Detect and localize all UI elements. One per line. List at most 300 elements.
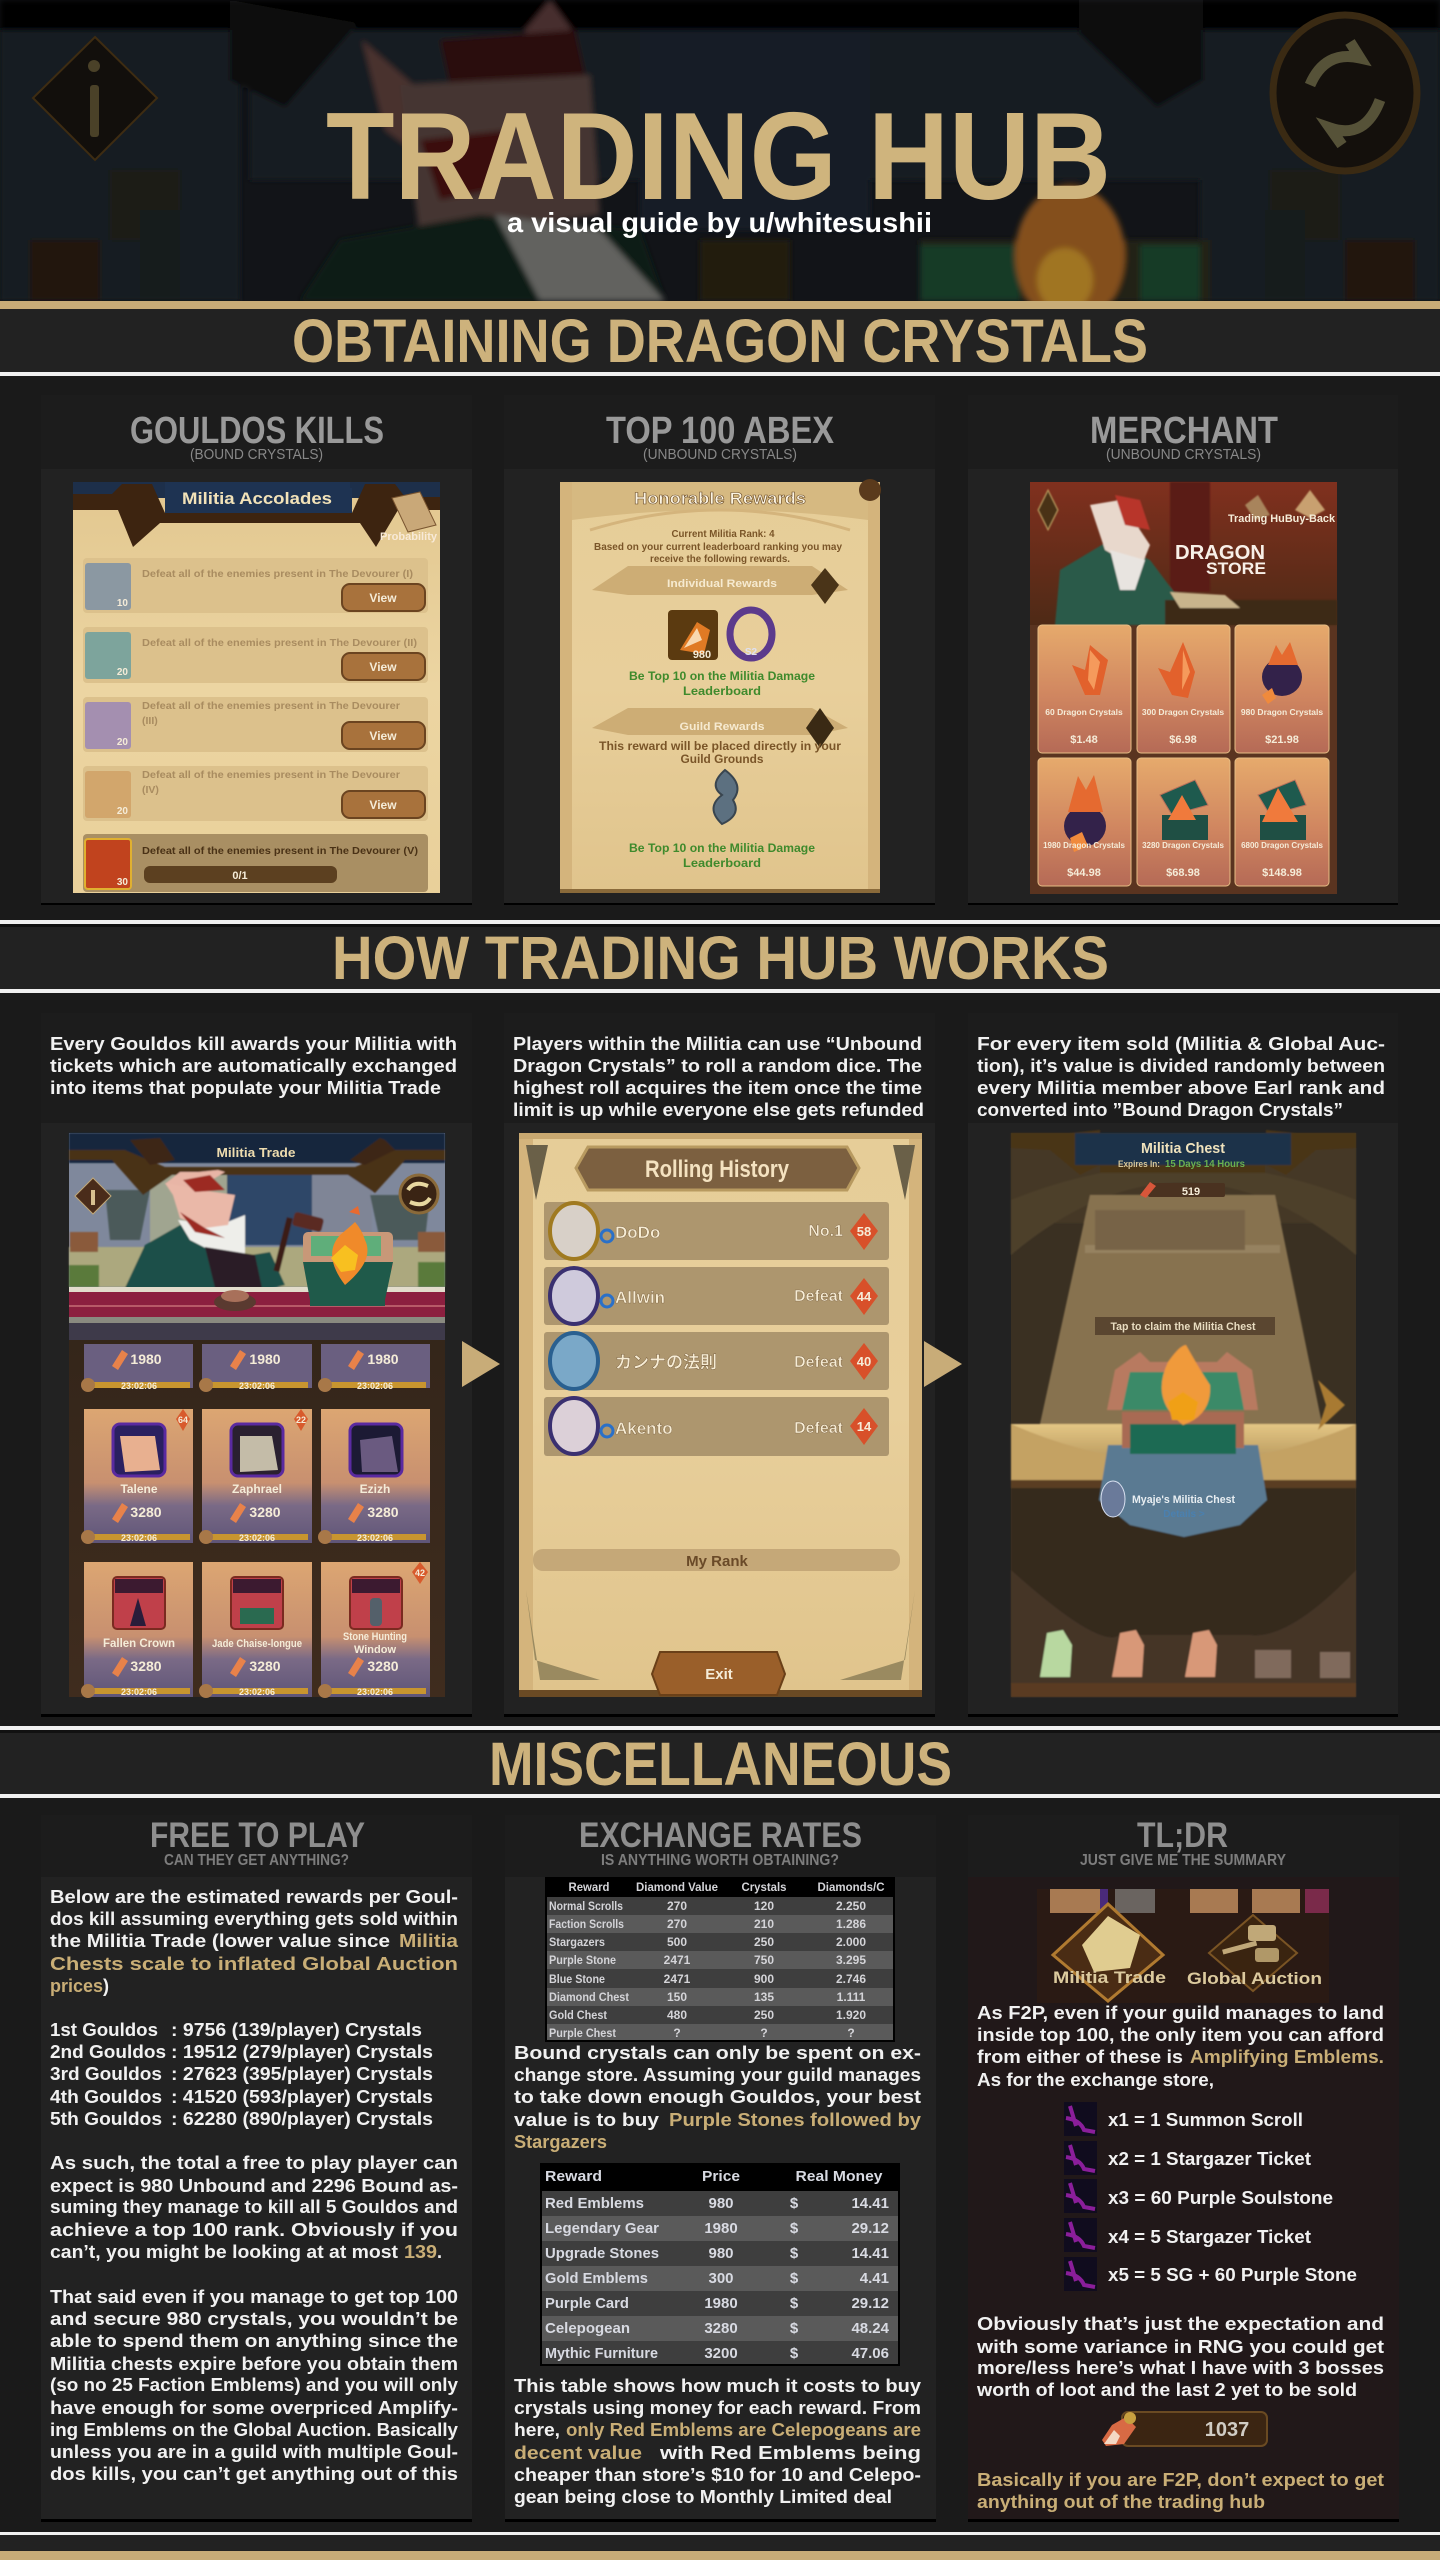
paragraph: estimated rewards: ): [103, 1976, 109, 1996]
panel: militia trade step: [41, 1013, 472, 1717]
screenshot: militia accolades: (IV): [142, 784, 159, 796]
prices and timers: 3280: [367, 1504, 399, 1520]
screenshot: dragon store: 980 Dragon Crystals: [1241, 707, 1323, 717]
screenshot: militia accolades: Defeat all of the enemies present in The Devourer (I): [142, 568, 413, 580]
table: diamond value per crystal: 2.000: [836, 1935, 866, 1949]
screenshot: dragon store: $148.98: [1262, 867, 1302, 879]
paragraph: total expectation: achieve a top 100 rank. Obviously if you: [50, 2220, 458, 2240]
panel: gouldos kills: GOULDOS KILLS: [130, 410, 384, 452]
prices and timers: 23:02:06: [357, 1381, 393, 1391]
panel: free to play: CAN THEY GET ANYTHING?: [164, 1852, 349, 1869]
table: diamond value per crystal: 150: [667, 1990, 687, 2004]
table: real money cost: Celepogean: [545, 2320, 630, 2337]
table: real money cost: 1980: [704, 2295, 738, 2312]
section band: obtaining dragon crystals: OBTAINING DRAGON CRYSTALS: [292, 307, 1148, 375]
table: diamond value per crystal: Stargazers: [549, 1935, 605, 1949]
table: diamond value per crystal: 480: [667, 2008, 687, 2022]
table: real money cost: $: [790, 2295, 799, 2312]
table: real money cost: $: [790, 2320, 799, 2337]
list: crystals per gouldos: 5th Gouldos: [50, 2109, 162, 2129]
paragraph: rng variance: worth of loot and the last 2 yet to be sold: [976, 2380, 1357, 2400]
screenshot: rolling history: 40: [857, 1354, 871, 1369]
list: amplifying emblem rewards: x3 = 60 Purple Soulstone: [1108, 2188, 1333, 2208]
table: diamond value per crystal: Faction Scrolls: [549, 1917, 624, 1931]
prices and timers: 1980: [130, 1351, 162, 1367]
prices and timers: 23:02:06: [239, 1533, 275, 1543]
table: real money cost: Legendary Gear: [545, 2220, 659, 2237]
paragraph: f2p options: inside top 100, the only item you can afford: [977, 2025, 1384, 2045]
paragraph: table explanation: crystals using money for each reward. From: [514, 2398, 921, 2418]
screenshot: militia accolades: Militia Accolades: [182, 489, 332, 508]
list: crystals per gouldos: : 41520 (593/player) Crystals: [171, 2087, 433, 2107]
step 2 text: highest roll acquires the item once the time: [513, 1078, 922, 1098]
screenshot: militia accolades: 30: [117, 877, 128, 888]
step 2 text: [513, 1034, 924, 1120]
paragraph: estimated rewards: Below are the estimated rewards per Goul-: [50, 1887, 458, 1907]
paragraph: f2p options: As for the exchange store,: [977, 2070, 1214, 2090]
screenshot: militia chest: 519: [1182, 1186, 1200, 1198]
screenshot: honorable rewards: Current Militia Rank: 4: [672, 529, 775, 540]
screenshot: dragon store: $1.48: [1070, 734, 1098, 746]
table: diamond value per crystal: 750: [754, 1953, 774, 1967]
table: diamond value per crystal: 2471: [664, 1953, 691, 1967]
title: TRADING HUB: [326, 88, 1111, 226]
section band: how trading hub works: HOW TRADING HUB WORKS: [332, 924, 1109, 992]
panel: merchant: MERCHANT: [1090, 410, 1278, 452]
table: real money cost: 47.06: [851, 2345, 889, 2362]
panel: merchant: [968, 395, 1398, 905]
screenshot: militia accolades: View: [369, 660, 397, 674]
paragraph: rng variance: [976, 2314, 1384, 2400]
screenshot: rolling history: 44: [857, 1289, 872, 1304]
table: diamond value per crystal: ?: [847, 2026, 855, 2040]
table: diamond value per crystal: Crystals: [742, 1880, 787, 1894]
conclusion: Basically if you are F2P, don’t expect to get: [977, 2470, 1384, 2490]
table: diamond value per crystal: 2.250: [836, 1899, 866, 1913]
paragraph: total expectation: suming they manage to kill all 5 Gouldos and: [50, 2197, 458, 2217]
screenshot: honorable rewards: Be Top 10 on the Militia Damage: [629, 843, 815, 855]
paragraph: conclusion: ing Emblems on the Global Auction. Basically: [50, 2420, 458, 2440]
item cards row 3: Stone Hunting: [343, 1631, 407, 1643]
screenshot: honorable rewards: Leaderboard: [683, 858, 761, 870]
list: crystals per gouldos: 3rd Gouldos: [50, 2064, 162, 2084]
table: real money cost: Price: [702, 2168, 740, 2185]
paragraph: rng variance: with some variance in RNG you could get: [976, 2337, 1384, 2357]
table: diamond value per crystal: 2.746: [836, 1972, 866, 1986]
subtitle: a visual guide by u/whitesushii: [507, 207, 932, 238]
screenshot: rolling history: DoDo: [615, 1223, 660, 1242]
screenshot: dragon store: $44.98: [1067, 867, 1101, 879]
item cards row 3: 42: [415, 1568, 425, 1578]
item cards row 2: [84, 1409, 430, 1543]
paragraph: bound crystals: Bound crystals can only be spent on ex-: [514, 2043, 921, 2063]
screenshot: dragon store: STORE: [1206, 559, 1266, 578]
panel: top 100 abex: TOP 100 ABEX: [606, 410, 835, 452]
icon: bound crystal counter: [1102, 2412, 1267, 2446]
table: diamond value per crystal: 3.295: [836, 1953, 866, 1967]
screenshot: militia trade: [69, 1133, 445, 1698]
screenshot: militia accolades: [73, 482, 440, 893]
table: diamond value per crystal: ?: [673, 2026, 681, 2040]
screenshot: honorable rewards: Be Top 10 on the Militia Damage: [629, 671, 815, 683]
screenshot: rolling history: 14: [857, 1419, 872, 1434]
screenshot: rolling history: No.1: [808, 1223, 843, 1240]
screenshot: dragon store: 60 Dragon Crystals: [1045, 707, 1123, 717]
paragraph: f2p options: Amplifying Emblems.: [1190, 2047, 1384, 2067]
table: diamond value per crystal: 1.286: [836, 1917, 866, 1931]
paragraph: estimated rewards: Chests scale to inflated Global Auction: [50, 1954, 458, 1974]
screenshot: militia accolades: 20: [117, 737, 128, 748]
step 3 text: tion), it’s value is divided randomly between: [977, 1056, 1385, 1076]
screenshot: rolling history: Rolling History: [645, 1156, 790, 1183]
screenshot: militia accolades: Defeat all of the enemies present in The Devourer (V): [142, 845, 418, 857]
table: diamond value per crystal: 270: [667, 1917, 687, 1931]
item cards row 3: Jade Chaise-longue: [212, 1638, 302, 1650]
screenshot: dragon store: [1030, 482, 1337, 894]
list: crystals per gouldos: [50, 2020, 433, 2129]
table: real money cost: 980: [708, 2245, 734, 2262]
screenshot: honorable rewards: Honorable Rewards: [634, 489, 806, 508]
step 1 text: into items that populate your Militia Trade: [50, 1078, 441, 1098]
item cards row 3: [84, 1562, 430, 1697]
prices and timers: 3280: [130, 1504, 162, 1520]
screenshot: rolling history: 58: [857, 1224, 871, 1239]
paragraph: total expectation: .: [437, 2242, 442, 2262]
paragraph: rng variance: Obviously that’s just the expectation and: [977, 2314, 1384, 2334]
step 3 text: every Militia member above Earl rank and: [977, 1078, 1385, 1098]
item cards row 3: Window: [354, 1644, 396, 1656]
screenshot: militia accolades: Defeat all of the enemies present in The Devourer: [142, 769, 400, 781]
table: diamond value per crystal: 135: [754, 1990, 774, 2004]
screenshot: militia chest: 15 Days 14 Hours: [1165, 1159, 1245, 1170]
table: real money cost: $: [790, 2270, 799, 2287]
prices and timers: 23:02:06: [357, 1687, 393, 1697]
panel: exchange rates: [505, 1815, 936, 2522]
table: real money cost: 3280: [704, 2320, 738, 2337]
screenshot: militia chest: [1011, 1130, 1356, 1697]
step 1 text: [50, 1034, 457, 1098]
prices and timers: 23:02:06: [121, 1687, 157, 1697]
table: diamond value per crystal: Purple Chest: [549, 2026, 616, 2040]
screenshot: honorable rewards: Guild Rewards: [680, 721, 764, 733]
step 3 text: For every item sold (Militia & Global Auc-: [977, 1034, 1385, 1054]
screenshot: dragon store: $21.98: [1265, 734, 1299, 746]
list: crystals per gouldos: : 9756 (139/player) Crystals: [171, 2020, 422, 2040]
arrow: step 1 to 2: [462, 1341, 500, 1387]
paragraph: f2p options: [977, 2003, 1384, 2090]
table: real money cost: 4.41: [860, 2270, 889, 2287]
paragraph: conclusion: [50, 2287, 458, 2484]
icon: bound crystal counter: 1037: [1205, 2419, 1249, 2441]
section band: miscellaneous: MISCELLANEOUS: [489, 1730, 952, 1798]
paragraph: f2p options: from either of these is: [977, 2047, 1183, 2067]
paragraph: estimated rewards: the Militia Trade (lower value since: [50, 1931, 390, 1951]
panel: top 100 abex: [504, 395, 935, 905]
screenshot: rolling history: My Rank: [686, 1553, 748, 1570]
table: diamond value per crystal: 270: [667, 1899, 687, 1913]
prices and timers: 23:02:06: [239, 1687, 275, 1697]
panel: exchange rates: IS ANYTHING WORTH OBTAINING?: [601, 1852, 839, 1869]
table: real money cost: Gold Emblems: [545, 2270, 648, 2287]
step 1 text: tickets which are automatically exchanged: [50, 1056, 457, 1076]
table: real money cost: [540, 2163, 900, 2366]
table: real money cost: 48.24: [851, 2320, 890, 2337]
screenshot: rolling history: Allwin: [615, 1288, 665, 1307]
paragraph: bound crystals: [514, 2043, 921, 2152]
conclusion: [977, 2470, 1384, 2512]
paragraph: total expectation: 139: [404, 2242, 437, 2262]
screenshot: militia chest: Details >: [1163, 1509, 1205, 1520]
paragraph: bound crystals: Purple Stones followed by: [669, 2110, 921, 2130]
paragraph: estimated rewards: Militia: [399, 1931, 459, 1951]
table: diamond value per crystal: Diamond Value: [636, 1880, 718, 1894]
conclusion: anything out of the trading hub: [977, 2492, 1265, 2512]
screenshot: honorable rewards: Leaderboard: [683, 686, 761, 698]
step 2 text: limit is up while everyone else gets refunded: [513, 1100, 924, 1120]
table: real money cost: $: [790, 2345, 799, 2362]
footer band: [0, 2532, 1440, 2560]
paragraph: estimated rewards: [50, 1887, 459, 1996]
table: diamond value per crystal: Normal Scrolls: [549, 1899, 623, 1913]
table: real money cost: 1980: [704, 2220, 738, 2237]
screenshot: militia accolades: View: [369, 798, 397, 812]
panel: gouldos kills: [41, 395, 472, 905]
list: crystals per gouldos: 1st Gouldos: [50, 2020, 158, 2040]
screenshot: rolling history: カンナの法則: [615, 1353, 717, 1372]
paragraph: table explanation: cheaper than store’s $10 for 10 and Celepo-: [514, 2465, 921, 2485]
table: diamond value per crystal: Diamond Chest: [549, 1990, 629, 2004]
screenshot: rolling history: [519, 1133, 922, 1697]
table: real money cost: 300: [708, 2270, 734, 2287]
list: crystals per gouldos: 2nd Gouldos: [50, 2042, 166, 2062]
item cards row 2: Talene: [120, 1482, 158, 1496]
panel: tl;dr: TL;DR: [1137, 1816, 1228, 1855]
prices and timers: 1980: [367, 1351, 399, 1367]
header banner artwork: [0, 0, 1440, 325]
table: diamond value per crystal: 1.111: [837, 1990, 866, 2004]
image: militia trade and global auction buttons: Militia Trade: [1053, 1968, 1166, 1987]
table: real money cost: Red Emblems: [545, 2195, 644, 2212]
table: real money cost: 14.41: [851, 2245, 889, 2262]
paragraph: table explanation: [514, 2376, 921, 2507]
list: amplifying emblem rewards: x4 = 5 Stargazer Ticket: [1108, 2227, 1311, 2247]
panel: tl;dr: JUST GIVE ME THE SUMMARY: [1080, 1852, 1286, 1869]
paragraph: total expectation: As such, the total a free to play player can: [50, 2153, 458, 2173]
paragraph: estimated rewards: dos kill assuming everything gets sold within: [50, 1909, 458, 1929]
paragraph: conclusion: (so no 25 Faction Emblems) and you will only: [50, 2375, 458, 2395]
screenshot: honorable rewards: Individual Rewards: [667, 578, 777, 590]
table: real money cost: 29.12: [851, 2295, 889, 2312]
list: amplifying emblem rewards: x2 = 1 Stargazer Ticket: [1108, 2149, 1311, 2169]
table: diamond value per crystal: Gold Chest: [549, 2008, 607, 2022]
paragraph: conclusion: and secure 980 crystals, you wouldn’t be: [50, 2309, 458, 2329]
list: crystals per gouldos: 4th Gouldos: [50, 2087, 162, 2107]
table: diamond value per crystal: 900: [754, 1972, 774, 1986]
screenshot: honorable rewards: S2: [745, 647, 758, 658]
screenshot: militia accolades: 10: [117, 598, 128, 609]
paragraph: table explanation: with Red Emblems being: [659, 2443, 921, 2463]
table: real money cost: Purple Card: [545, 2295, 629, 2312]
table: diamond value per crystal: 210: [754, 1917, 774, 1931]
image: militia trade and global auction buttons: Global Auction: [1187, 1969, 1322, 1988]
screenshot: honorable rewards: [560, 479, 881, 893]
table: diamond value per crystal: 1.920: [836, 2008, 866, 2022]
table: diamond value per crystal: 500: [667, 1935, 687, 1949]
table: diamond value per crystal: Diamonds/C: [818, 1880, 885, 1894]
screenshot: militia trade: Militia Trade: [216, 1145, 296, 1160]
prices and timers: 23:02:06: [121, 1533, 157, 1543]
table: real money cost: Real Money: [796, 2168, 883, 2185]
panel: tl;dr: [968, 1815, 1399, 2522]
paragraph: conclusion: have enough for some overpriced Amplify-: [50, 2398, 458, 2418]
screenshot: rolling history: Exit: [705, 1666, 733, 1683]
screenshot: rolling history: Akento: [615, 1419, 673, 1438]
item cards row 2: 22: [296, 1415, 306, 1425]
item cards row 2: Ezizh: [360, 1482, 390, 1496]
screenshot: militia chest: Myaje's Militia Chest: [1132, 1494, 1235, 1506]
paragraph: bound crystals: to take down enough Gouldos, your best: [514, 2087, 921, 2107]
prices and timers: 3280: [367, 1658, 399, 1674]
screenshot: honorable rewards: Based on your current leaderboard ranking you may: [594, 542, 842, 553]
section band: obtaining dragon crystals: [0, 301, 1440, 376]
panel: free to play: FREE TO PLAY: [150, 1816, 365, 1855]
prices and timers: 3280: [249, 1658, 281, 1674]
step 3 text: converted into ”Bound Dragon Crystals”: [977, 1100, 1343, 1120]
paragraph: table explanation: This table shows how much it costs to buy: [514, 2376, 921, 2396]
screenshot: dragon store: 300 Dragon Crystals: [1142, 707, 1224, 717]
paragraph: total expectation: [50, 2153, 458, 2262]
prices and timers: 23:02:06: [121, 1381, 157, 1391]
list: amplifying emblem rewards: [1064, 2102, 1357, 2291]
table: real money cost: Reward: [545, 2168, 602, 2185]
prices and timers: 1980: [249, 1351, 281, 1367]
table: real money cost: 14.41: [851, 2195, 889, 2212]
paragraph: table explanation: decent value: [514, 2443, 642, 2463]
paragraph: conclusion: able to spend them on anything since the: [50, 2331, 458, 2351]
paragraph: total expectation: can’t, you might be looking at at most: [50, 2242, 398, 2262]
item cards row 2: Zaphrael: [232, 1482, 282, 1496]
table: diamond value per crystal: ?: [760, 2026, 768, 2040]
screenshot: dragon store: 3280 Dragon Crystals: [1142, 841, 1224, 850]
screenshot: honorable rewards: Guild Grounds: [680, 754, 764, 766]
screenshot: militia accolades: 0/1: [232, 870, 248, 882]
table: diamond value per crystal: Reward: [568, 1880, 610, 1894]
screenshot: dragon store: 1980 Dragon Crystals: [1043, 841, 1125, 850]
section band: miscellaneous: [0, 1726, 1440, 1798]
arrow: step 2 to 3: [924, 1341, 962, 1387]
panel: gouldos kills: (BOUND CRYSTALS): [190, 446, 323, 463]
paragraph: table explanation: only Red Emblems are Celepogeans are: [566, 2420, 921, 2440]
screenshot: dragon store: $68.98: [1166, 867, 1200, 879]
screenshot: dragon store: 6800 Dragon Crystals: [1241, 841, 1323, 850]
prices and timers: 3280: [249, 1504, 281, 1520]
step 2 text: Players within the Militia can use “Unbound: [513, 1034, 922, 1054]
paragraph: f2p options: As F2P, even if your guild manages to land: [977, 2003, 1384, 2023]
step 1 text: Every Gouldos kill awards your Militia with: [50, 1034, 457, 1054]
list: amplifying emblem rewards: x5 = 5 SG + 60 Purple Stone: [1108, 2265, 1357, 2285]
screenshot: rolling history: Defeat: [794, 1420, 844, 1437]
paragraph: conclusion: dos kills, you can’t get anything out of this: [50, 2464, 458, 2484]
screenshot: militia accolades: View: [369, 729, 397, 743]
panel: top 100 abex: (UNBOUND CRYSTALS): [643, 446, 797, 463]
list: amplifying emblem rewards: x1 = 1 Summon Scroll: [1108, 2110, 1303, 2130]
paragraph: total expectation: expect is 980 Unbound and 2296 Bound as-: [50, 2176, 458, 2196]
table: real money cost: 3200: [704, 2345, 738, 2362]
section band: how trading hub works: [0, 920, 1440, 993]
screenshot: militia accolades: Probability: [380, 531, 438, 543]
paragraph: conclusion: That said even if you manage to get top 100: [50, 2287, 458, 2307]
paragraph: table explanation: gean being close to Monthly Limited deal: [514, 2487, 892, 2507]
prices and timers: 23:02:06: [239, 1381, 275, 1391]
paragraph: bound crystals: Stargazers: [514, 2132, 607, 2152]
screenshot: honorable rewards: This reward will be placed directly in your: [599, 741, 842, 753]
screenshot: honorable rewards: 980: [693, 649, 711, 661]
paragraph: conclusion: unless you are in a guild with multiple Goul-: [50, 2442, 458, 2462]
table: diamond value per crystal: 250: [754, 1935, 774, 1949]
paragraph: bound crystals: change store. Assuming your guild manages: [514, 2065, 921, 2085]
screenshot: militia chest: Militia Chest: [1141, 1140, 1225, 1157]
panel: free to play: [41, 1815, 472, 2522]
item cards row 3: Fallen Crown: [103, 1636, 175, 1650]
paragraph: rng variance: more/less here’s what I have with 3 bosses: [977, 2358, 1384, 2378]
prices and timers: 23:02:06: [357, 1533, 393, 1543]
list: crystals per gouldos: : 27623 (395/player) Crystals: [171, 2064, 433, 2084]
screenshot: militia accolades: (III): [142, 715, 158, 727]
table: diamond value per crystal: [545, 1877, 895, 2042]
paragraph: bound crystals: value is to buy: [514, 2110, 659, 2130]
prices and timers: 3280: [130, 1658, 162, 1674]
screenshot: dragon store: $6.98: [1169, 734, 1197, 746]
paragraph: estimated rewards: prices: [50, 1976, 103, 1996]
screenshot: militia accolades: 20: [117, 806, 128, 817]
table: diamond value per crystal: Blue Stone: [549, 1972, 605, 1986]
screenshot: militia accolades: Defeat all of the enemies present in The Devourer (II): [142, 637, 417, 649]
table: real money cost: $: [790, 2220, 799, 2237]
table: diamond value per crystal: 120: [754, 1899, 774, 1913]
step 2 text: Dragon Crystals” to roll a random dice. The: [513, 1056, 922, 1076]
item cards row 2: 64: [178, 1415, 188, 1425]
panel: rolling history step: [504, 1013, 935, 1717]
panel: exchange rates: EXCHANGE RATES: [579, 1816, 862, 1855]
screenshot: rolling history: Defeat: [794, 1288, 844, 1305]
paragraph: conclusion: Militia chests expire before you obtain them: [50, 2354, 458, 2374]
paragraph: table explanation: here,: [514, 2420, 560, 2440]
table: real money cost: 980: [708, 2195, 734, 2212]
screenshot: militia accolades: 20: [117, 667, 128, 678]
table: diamond value per crystal: Purple Stone: [549, 1953, 616, 1967]
screenshot: rolling history: Defeat: [794, 1354, 844, 1371]
screenshot: militia accolades: Defeat all of the enemies present in The Devourer: [142, 700, 400, 712]
table: real money cost: $: [790, 2245, 799, 2262]
list: crystals per gouldos: : 19512 (279/player) Crystals: [171, 2042, 433, 2062]
prices and timers: [81, 1350, 426, 1698]
table: real money cost: Mythic Furniture: [545, 2345, 658, 2362]
screenshot: honorable rewards: receive the following rewards.: [650, 554, 790, 565]
table: diamond value per crystal: 250: [754, 2008, 774, 2022]
step 3 text: [977, 1034, 1385, 1120]
screenshot: dragon store: Trading HuBuy-Back: [1228, 513, 1336, 525]
table: real money cost: Upgrade Stones: [545, 2245, 659, 2262]
screenshot: dragon store: DRAGON: [1175, 542, 1265, 564]
list: crystals per gouldos: : 62280 (890/player) Crystals: [171, 2109, 433, 2129]
table: real money cost: 29.12: [851, 2220, 889, 2237]
screenshot: militia chest: Tap to claim the Militia Chest: [1110, 1321, 1256, 1333]
screenshot: militia chest: Expires In:: [1118, 1159, 1160, 1169]
panel: merchant: (UNBOUND CRYSTALS): [1106, 446, 1261, 463]
panel: militia chest step: [968, 1013, 1398, 1717]
table: diamond value per crystal: 2471: [664, 1972, 691, 1986]
screenshot: militia accolades: View: [369, 591, 397, 605]
